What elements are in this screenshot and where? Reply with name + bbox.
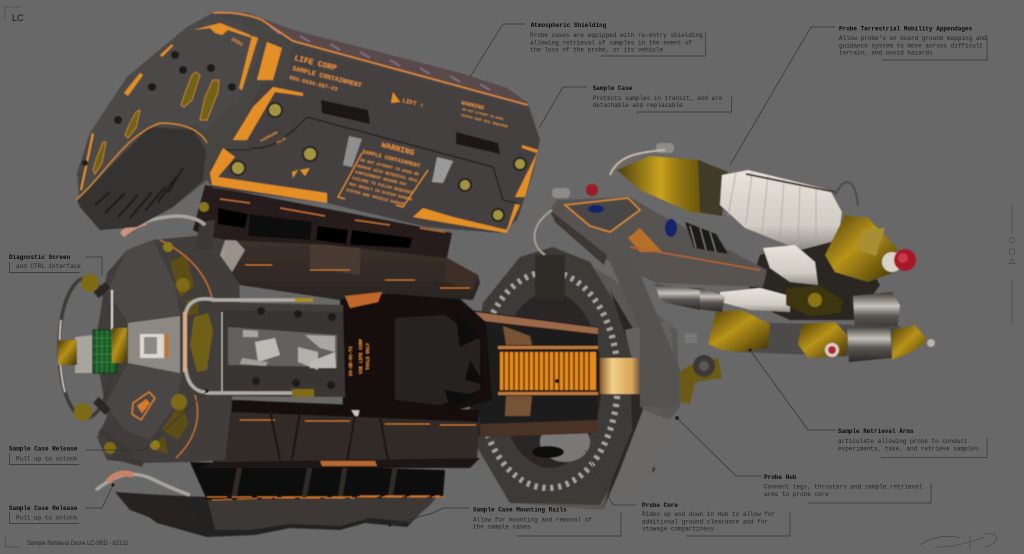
green diagnostic screen: [93, 330, 117, 373]
callout: probe core: stowage compartiness: [642, 526, 714, 533]
callout: probe hub: Probe Hub: [764, 474, 797, 481]
callout: diagnostic screen: [9, 254, 102, 275]
front plate: [208, 45, 540, 233]
case markings text: SYSTEM CODE SEAL REQUIRED: [461, 113, 508, 129]
callout: atmospheric shielding: [470, 22, 706, 77]
callout: sample case mounting rails: the sample cases: [473, 524, 531, 531]
left face windows: [82, 51, 236, 174]
case markings text: [230, 37, 508, 208]
orange markings: [80, 23, 538, 233]
logo: LC: [5, 7, 24, 23]
case underside rail: [122, 185, 452, 258]
case markings text: SYSTEM AND VEHICLE DAMAGE: [346, 189, 405, 208]
callout: terrestrial mobility appendages: [730, 26, 987, 165]
black inner fuselage: [340, 290, 492, 412]
callout: probe core: additional ground clearance and for: [642, 519, 768, 526]
callout: sample case: [539, 85, 732, 128]
hub top plate: [535, 188, 767, 407]
case markings text: WARNING: [461, 99, 485, 112]
callout: sample case release upper: Pull up to unlock: [16, 456, 78, 463]
side navigation icons: [1009, 205, 1015, 325]
atmospheric shielding band: [247, 13, 528, 106]
silver pipe: [185, 298, 314, 397]
case markings text: CONTAINMENT HAZARD MAY: [355, 171, 407, 188]
logo: LC: LC: [12, 13, 24, 23]
mid lower case rail: [200, 400, 480, 468]
probe core: [470, 310, 640, 437]
artist signature scribble: [920, 533, 996, 549]
mechanical clutter behind legs: [745, 225, 880, 320]
case markings text: 99X-5S34-X87-V3: [289, 74, 339, 93]
callout: sample case: Sample Case: [593, 85, 633, 92]
case markings text: DO NOT ATTEMPT TO OPEN OR: [360, 159, 419, 178]
orange display: [500, 352, 596, 390]
case markings text: FAILURE TO FOLLOW REQUIRED: [352, 177, 414, 196]
gray centre deck: [185, 298, 345, 397]
callout: sample case: Protects samples in transit, and are: [593, 95, 723, 102]
case markings text: SAMPLE CONTAINMENT: [292, 65, 362, 89]
head housing octagon: [95, 232, 240, 463]
black inner fuselage: TOOLS ONLY: [365, 343, 371, 370]
case markings text: MAY RESULT IN SYSTEM DAMAGE: [349, 183, 413, 203]
diagnostic ring handle: [58, 274, 143, 464]
lower terrestrial leg: [680, 292, 935, 404]
callout: terrestrial mobility appendages: Probe Terrestrial Mobility Appendages: [839, 26, 973, 32]
case markings text: LIFE CORP: [293, 54, 338, 73]
upper terrestrial leg: [586, 143, 916, 316]
case markings text: DO NOT ATTEMPT TO OPEN: [462, 107, 504, 121]
callout: sample retrieval arms: experiments, take, and retrieve samples.: [838, 446, 982, 452]
footer caption: Sample Retrieval Drone LC-SRD - 62122: [27, 541, 129, 547]
callout: probe hub: [675, 416, 931, 503]
orange icon plate: [132, 392, 155, 420]
callout: sample case mounting rails: Sample Case Mounting Rails: [473, 507, 567, 514]
tread bumper: [76, 123, 207, 230]
callout: sample retrieval arms: Sample Retrieval Arms: [838, 428, 914, 435]
callout: diagnostic screen: Diagnostic Screen: [9, 254, 71, 261]
callout: probe core: [585, 450, 790, 536]
left end face: [80, 13, 262, 200]
case markings text: 2903: [230, 37, 243, 48]
callout: probe core: Rides up and down in Hub to allow for: [642, 511, 776, 518]
upper case rail: [220, 232, 480, 308]
callout: sample case mounting rails: Allow for mounting and removal of: [473, 517, 592, 524]
callout: sample retrieval arms: articulate allowing probe to conduct: [838, 438, 968, 445]
bottom scalloped case rail: [96, 462, 445, 537]
callout: sample case release upper: Sample Case Release: [9, 446, 78, 453]
case markings text: SAMPLE CONTAINMENT: [362, 148, 422, 169]
callout: probe hub: arms to probe core: [764, 491, 829, 498]
case markings text: WARNING: [380, 141, 415, 158]
screws: [231, 103, 526, 221]
case body: [77, 13, 540, 233]
callout: sample case release lower: Sample Case Release: [9, 505, 78, 512]
black inner fuselage: 99-SD-00-TX: [348, 346, 354, 376]
callout: atmospheric shielding: Atmospheric Shielding: [531, 22, 607, 29]
callout: diagnostic screen: and CTRL interface: [16, 263, 81, 270]
callout: sample retrieval arms: [748, 348, 987, 458]
callout: sample case mounting rails: [388, 507, 621, 536]
probe hub: [470, 247, 680, 510]
callout: probe core: Probe Core: [642, 502, 678, 509]
callout: atmospheric shielding: the loss of the probe, or its vehicle: [530, 47, 664, 54]
footer caption: [6, 537, 129, 547]
warning frame: [338, 153, 428, 207]
callout: atmospheric shielding: Probe cases are equipped with re-entry shielding: [530, 32, 703, 39]
callout: sample case release upper: [9, 389, 209, 464]
case markings text: VALVE: [276, 137, 287, 146]
callout: sample case: detachable and replacable: [593, 102, 683, 109]
sample case: [76, 13, 540, 233]
case markings text: LIFT ⇧: [402, 97, 425, 109]
callout: terrestrial mobility appendages: terrain, and avoid hazards: [839, 50, 933, 57]
callout: sample case release lower: [9, 483, 115, 524]
callout: sample case release lower: Pull up to unlock: [16, 514, 78, 521]
latches and slots: [321, 100, 500, 183]
callout: terrestrial mobility appendages: guidance system to move across difficult: [839, 42, 983, 50]
callout: terrestrial mobility appendages: Allow probe's on board ground mapping and: [839, 35, 987, 42]
callout: atmospheric shielding: allowing retrieval of samples in the event of: [530, 40, 692, 46]
callout: probe hub: Connect legs, thrusters and sample retrieval: [764, 484, 923, 491]
case markings text: REMOVE WITH RETRIEVAL SEAL: [357, 165, 419, 184]
black inner fuselage: USE LIFE CORP: [358, 339, 364, 374]
case markings text: OVERBOARD: [260, 131, 279, 144]
